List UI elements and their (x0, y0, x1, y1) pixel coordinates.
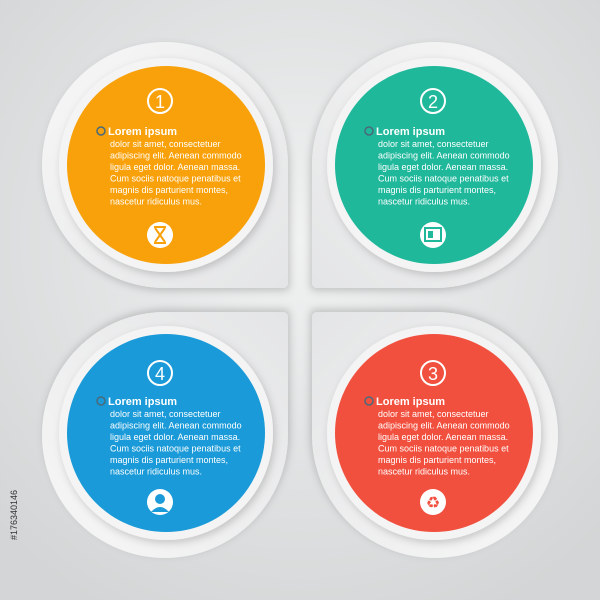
text 1: adipiscing elit. Aenean commodo (110, 150, 242, 160)
text 3: Cum sociis natoque penatibus et (378, 444, 509, 454)
badge 4: 4 (155, 364, 165, 384)
badge 2 (421, 89, 445, 113)
circle 1 (67, 66, 265, 264)
text 4 (97, 396, 242, 476)
icon: device (420, 222, 446, 248)
badge 3: 3 (428, 364, 438, 384)
panel 1: orange (42, 42, 288, 288)
badge 3 (421, 361, 445, 385)
badge 1: 1 (155, 92, 165, 112)
circle 4 (67, 334, 265, 532)
text 2: adipiscing elit. Aenean commodo (378, 150, 510, 160)
text 1: magnis dis parturient montes, (110, 185, 228, 195)
badge 2: 2 (428, 92, 438, 112)
icon: hourglass (147, 222, 173, 248)
text 4: magnis dis parturient montes, (110, 455, 228, 465)
text 3: dolor sit amet, consectetuer (378, 409, 489, 419)
text 3 (365, 396, 510, 476)
text 3: Lorem ipsum (376, 396, 445, 408)
text 3: magnis dis parturient montes, (378, 455, 496, 465)
text 4: Cum sociis natoque penatibus et (110, 444, 241, 454)
badge 1 (148, 89, 172, 113)
badge 4 (148, 361, 172, 385)
circle 2 (335, 66, 533, 264)
text 2: Lorem ipsum (376, 126, 445, 138)
text 2: dolor sit amet, consectetuer (378, 139, 489, 149)
text 2: nascetur ridiculus mus. (378, 196, 470, 206)
text 3: ligula eget dolor. Aenean massa. (378, 432, 508, 442)
panel 4: blue (42, 312, 288, 558)
text 3: nascetur ridiculus mus. (378, 466, 470, 476)
text 1: dolor sit amet, consectetuer (110, 139, 221, 149)
text 4: dolor sit amet, consectetuer (110, 409, 221, 419)
text 1: ligula eget dolor. Aenean massa. (110, 162, 240, 172)
icon: person (147, 489, 173, 515)
text 4: ligula eget dolor. Aenean massa. (110, 432, 240, 442)
text 1: Cum sociis natoque penatibus et (110, 174, 241, 184)
icon: recycle: ♻ (426, 495, 440, 512)
text 1 (97, 126, 242, 206)
stock id: #176340146 (9, 490, 19, 540)
text 4: adipiscing elit. Aenean commodo (110, 420, 242, 430)
text 4: nascetur ridiculus mus. (110, 466, 202, 476)
icon: recycle (420, 489, 446, 515)
text 2: Cum sociis natoque penatibus et (378, 174, 509, 184)
text 2 (365, 126, 510, 206)
text 2: ligula eget dolor. Aenean massa. (378, 162, 508, 172)
circle 3 (335, 334, 533, 532)
text 4: Lorem ipsum (108, 396, 177, 408)
panel 3: red (312, 312, 558, 558)
text 1: nascetur ridiculus mus. (110, 196, 202, 206)
text 1: Lorem ipsum (108, 126, 177, 138)
text 3: adipiscing elit. Aenean commodo (378, 420, 510, 430)
text 2: magnis dis parturient montes, (378, 185, 496, 195)
panel 2: teal (312, 42, 558, 288)
